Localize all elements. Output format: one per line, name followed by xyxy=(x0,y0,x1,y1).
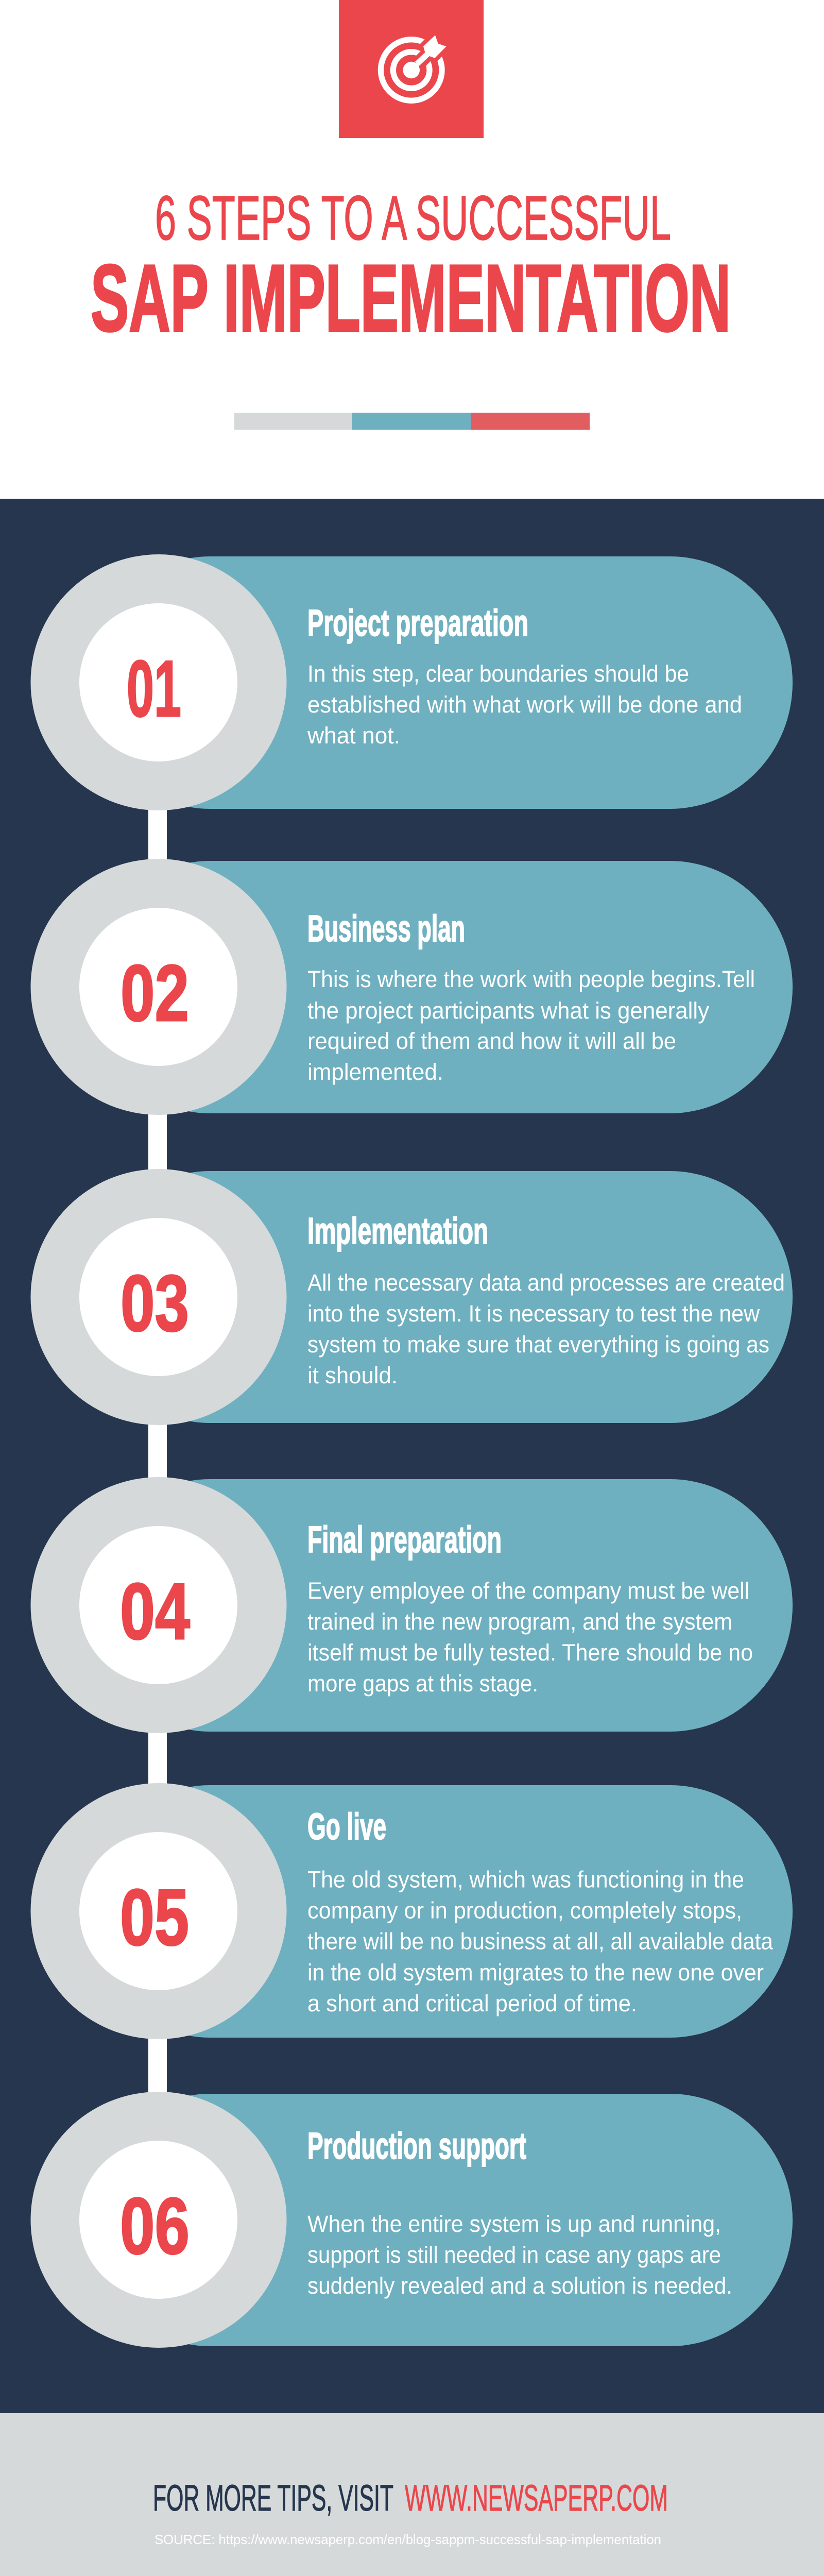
step 2: implemented. xyxy=(307,1059,443,1085)
step 2: Business plan xyxy=(307,908,465,950)
step 1: established with what work will be done and xyxy=(307,691,742,718)
step 2: This is where the work with people begins.Tell xyxy=(307,966,755,992)
step 1: In this step, clear boundaries should be xyxy=(307,660,689,687)
step 6: support is still needed in case any gaps are xyxy=(307,2242,721,2268)
step 4: itself must be fully tested. There should be no xyxy=(307,1639,753,1666)
step 4 xyxy=(31,1477,793,1733)
step 6: When the entire system is up and running, xyxy=(307,2211,721,2237)
step 3: Implementation xyxy=(307,1211,488,1252)
step 1: Project preparation xyxy=(307,603,528,644)
step 3: All the necessary data and processes are created xyxy=(307,1269,785,1296)
step 5: a short and critical period of time. xyxy=(307,1990,637,2016)
step 2: the project participants what is generally xyxy=(307,997,709,1024)
step 4: more gaps at this stage. xyxy=(307,1670,538,1697)
step 4: 04 xyxy=(120,1567,190,1656)
step 6: 06 xyxy=(120,2181,190,2270)
step 5: there will be no business at all, all available data xyxy=(307,1928,774,1955)
timeline connector xyxy=(148,683,167,2219)
step 5: The old system, which was functioning in the xyxy=(307,1866,744,1893)
step 5: in the old system migrates to the new one over xyxy=(307,1959,764,1986)
step 2: 02 xyxy=(121,948,189,1038)
title xyxy=(91,183,731,351)
step 6: suddenly revealed and a solution is needed. xyxy=(307,2273,732,2299)
step 4: Every employee of the company must be well xyxy=(307,1578,749,1604)
step 5 xyxy=(31,1783,793,2039)
step 3: into the system. It is necessary to test the new xyxy=(307,1300,760,1327)
step 2: required of them and how it will all be xyxy=(307,1028,676,1054)
step 5: 05 xyxy=(120,1873,189,1962)
step 3 xyxy=(31,1169,793,1425)
step 1 xyxy=(31,554,793,810)
footer panel xyxy=(0,2413,824,2576)
source line: SOURCE: https://www.newsaperp.com/en/blog-sappm-successful-sap-implementation xyxy=(154,2532,661,2547)
call to action: FOR MORE TIPS, VISIT xyxy=(153,2478,393,2519)
step 1: 01 xyxy=(127,644,181,733)
panel: steps background xyxy=(0,499,824,2413)
step 3: 03 xyxy=(121,1259,189,1348)
step 6 xyxy=(31,2092,793,2348)
step 1: what not. xyxy=(307,722,400,749)
step 4: trained in the new program, and the system xyxy=(307,1608,732,1635)
step 5: company or in production, completely stops, xyxy=(307,1897,742,1924)
step 5: Go live xyxy=(307,1806,386,1848)
step 3: system to make sure that everything is going as xyxy=(307,1331,769,1358)
step 6: Production support xyxy=(307,2126,526,2167)
step 2 xyxy=(31,859,793,1115)
tricolour divider xyxy=(234,413,590,430)
step 3: it should. xyxy=(307,1362,398,1388)
header icon: target with arrow xyxy=(339,0,484,138)
step 4: Final preparation xyxy=(307,1519,502,1561)
